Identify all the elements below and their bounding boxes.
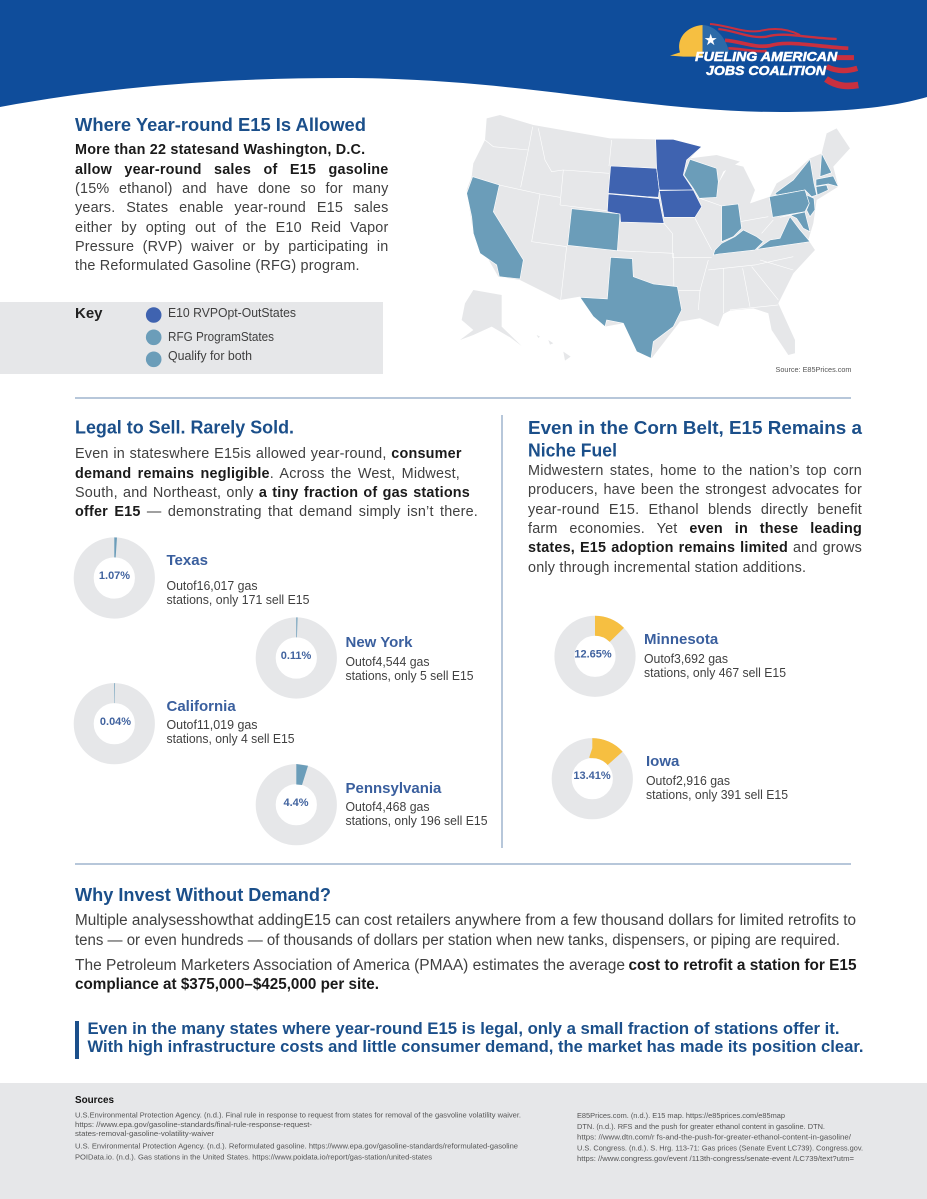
map: E10 opt-out states [607,139,702,223]
callout: Even in the many states where year-round E15 is legal, only a small fraction of stations offer it. [88,1020,840,1038]
header band [0,0,927,112]
text block: legal to sell: South, and Northeast, only a tiny fraction of gas stations [75,485,470,501]
donut: Minnesota [564,626,786,687]
sources panel: E85Prices.com. (n.d.). E15 map. https://e85prices.com/e85map [577,1111,785,1120]
sources panel: Sources [75,1095,114,1106]
key panel: RFG ProgramStates [168,330,274,344]
sources panel: states-removal-gasoline-volatility-waiver [75,1129,215,1138]
sources panel: https: //www.dtn.com/r fs-and-the-push-for-greater-ethanol-content-in-gasoline/ [577,1132,852,1142]
donut: Minnesota: Outof3,692 gas [644,652,728,666]
why invest body: compliance at $375,000–$425,000 per site. [75,976,379,993]
why invest body: Multiple analysesshowthat addingE15 can cost retailers anywhere from a few thousand dollars for limited retrofits to [75,912,856,929]
donut: Texas: 1.07% [99,570,130,582]
text block: corn belt: year-round E15. Ethanol blends directly benefit [528,502,862,518]
callout: With high infrastructure costs and little consumer demand, the market has made its position clear. [88,1038,864,1056]
text block: where allowed intro: years. States enable year-round E15 sales [75,200,388,216]
logo: ★ [704,32,718,49]
heading: legal to sell: Legal to Sell. Rarely Sold. [75,418,294,438]
map source: Source: E85Prices.com [776,365,852,374]
donut: Minnesota: Minnesota [644,631,719,648]
text block: legal to sell: Even in stateswhere E15is allowed year-round, consumer [75,446,462,462]
key panel: Qualify for both [168,349,252,363]
text block: where allowed intro: either by opting out of the E10 Reid Vapor [75,220,388,236]
sources panel: DTN. (n.d.). RFS and the push for greater ethanol content in gasoline. DTN. [577,1122,825,1131]
text block: corn belt: producers, have been the strongest advocates for [528,482,862,498]
logo [670,24,858,86]
text block: corn belt: farm economies. Yet even in these leading [528,521,862,537]
donut: Pennsylvania: 4.4% [283,797,309,809]
map: RFG states [467,153,838,358]
text block: where allowed intro: the Reformulated Gasoline (RFG) program. [75,258,360,274]
donut: California: California [166,698,236,715]
donut: Iowa: Outof2,916 gas [646,774,730,788]
donut: Iowa [562,748,788,809]
sources panel [0,1083,927,1199]
sources panel: U.S.Environmental Protection Agency. (n.d.). Final rule in response to request from states for removal of the gasvoline volatility waiver. [75,1110,521,1120]
text block: corn belt [528,463,862,576]
donut: Texas: Texas [166,552,208,569]
donut: Pennsylvania: stations, only 196 sell E15 [346,814,488,828]
donut: New York: stations, only 5 sell E15 [346,669,474,683]
text block: where allowed intro: More than 22 statesand Washington, D.C. [75,142,365,158]
text block: where allowed intro: Pressure (RVP) waiver or by participating in [75,239,388,255]
text block: legal to sell [75,446,478,520]
why invest body: cost to retrofit a station for E15 [628,957,857,974]
why invest body: The Petroleum Marketers Association of America (PMAA) estimates the average [75,957,625,974]
donut: Pennsylvania: Pennsylvania [346,780,442,797]
donut: New York [266,627,474,689]
heading: corn belt: Even in the Corn Belt, E15 Remains a [528,418,863,438]
text block: corn belt: Midwestern states, home to the nation’s top corn [528,463,862,479]
text block: where allowed intro [75,142,388,274]
map: base states [460,115,850,361]
text block: where allowed intro: (15% ethanol) and have done so for many [75,181,388,197]
key panel [0,302,383,374]
why invest body: tens — or even hundreds — of thousands of dollars per station when new tanks, dispensers, or piping are required. [75,932,840,949]
heading: where allowed: Where Year-round E15 Is Allowed [75,115,366,135]
text block: where allowed intro: allow year-round sales of E15 gasoline [75,162,388,178]
donut: Minnesota: 12.65% [574,648,612,660]
donut: Texas [84,547,309,609]
US map [460,115,850,361]
sources panel: POIData.io. (n.d.). Gas stations in the United States. https://www.poidata.io/report/gas-station/united-states [75,1152,432,1162]
sources panel: https: //www.congress.gov/event /113th-congress/senate-event /LC739/text?utm= [577,1154,854,1163]
text block: corn belt: states, E15 adoption remains limited and grows [528,540,862,556]
text block: legal to sell: offer E15 — demonstrating that demand simply isn’t there. [75,504,478,520]
donut: California [84,693,294,754]
text block: corn belt: only through incremental station additions. [528,560,806,576]
why invest body [75,912,857,993]
donut: Iowa: stations, only 391 sell E15 [646,788,788,802]
donut: New York: 0.11% [281,650,312,662]
heading: corn belt: Niche Fuel [528,440,617,460]
donut: Iowa: Iowa [646,753,680,770]
sources panel: U.S. Congress. (n.d.). S. Hrg. 113-71: Gas prices (Senate Event LC739). Congress.gov. [577,1144,863,1152]
donut: Minnesota: stations, only 467 sell E15 [644,666,786,680]
donut: California: stations, only 4 sell E15 [166,732,294,746]
logo: FUELING AMERICAN [695,49,838,64]
callout [75,1020,864,1059]
logo: JOBS COALITION [706,63,826,78]
donut: Texas: Outof16,017 gas [166,579,258,593]
sources panel: https: //www.epa.gov/gasoline-standards/final-rule-response-request- [75,1120,313,1129]
sources panel: U.S. Environmental Protection Agency. (n.d.). Reformulated gasoline. https://www.epa.gov/gasoline-standards/reformulated-gasoline [75,1142,518,1150]
key panel: Key [75,305,103,322]
donut: New York: Outof4,544 gas [346,655,430,669]
donut: California: Outof11,019 gas [166,718,258,732]
donut: Pennsylvania: Outof4,468 gas [346,800,430,814]
heading: why invest: Why Invest Without Demand? [75,885,331,905]
donut: Texas: stations, only 171 sell E15 [166,593,310,607]
donut: New York: New York [346,634,413,651]
key panel: E10 RVPOpt-OutStates [168,306,296,320]
donut: Iowa: 13.41% [573,770,611,782]
donut: Pennsylvania [266,764,488,835]
donut: California: 0.04% [100,716,131,728]
text block: legal to sell: demand remains negligible. Across the West, Midwest, [75,466,460,482]
